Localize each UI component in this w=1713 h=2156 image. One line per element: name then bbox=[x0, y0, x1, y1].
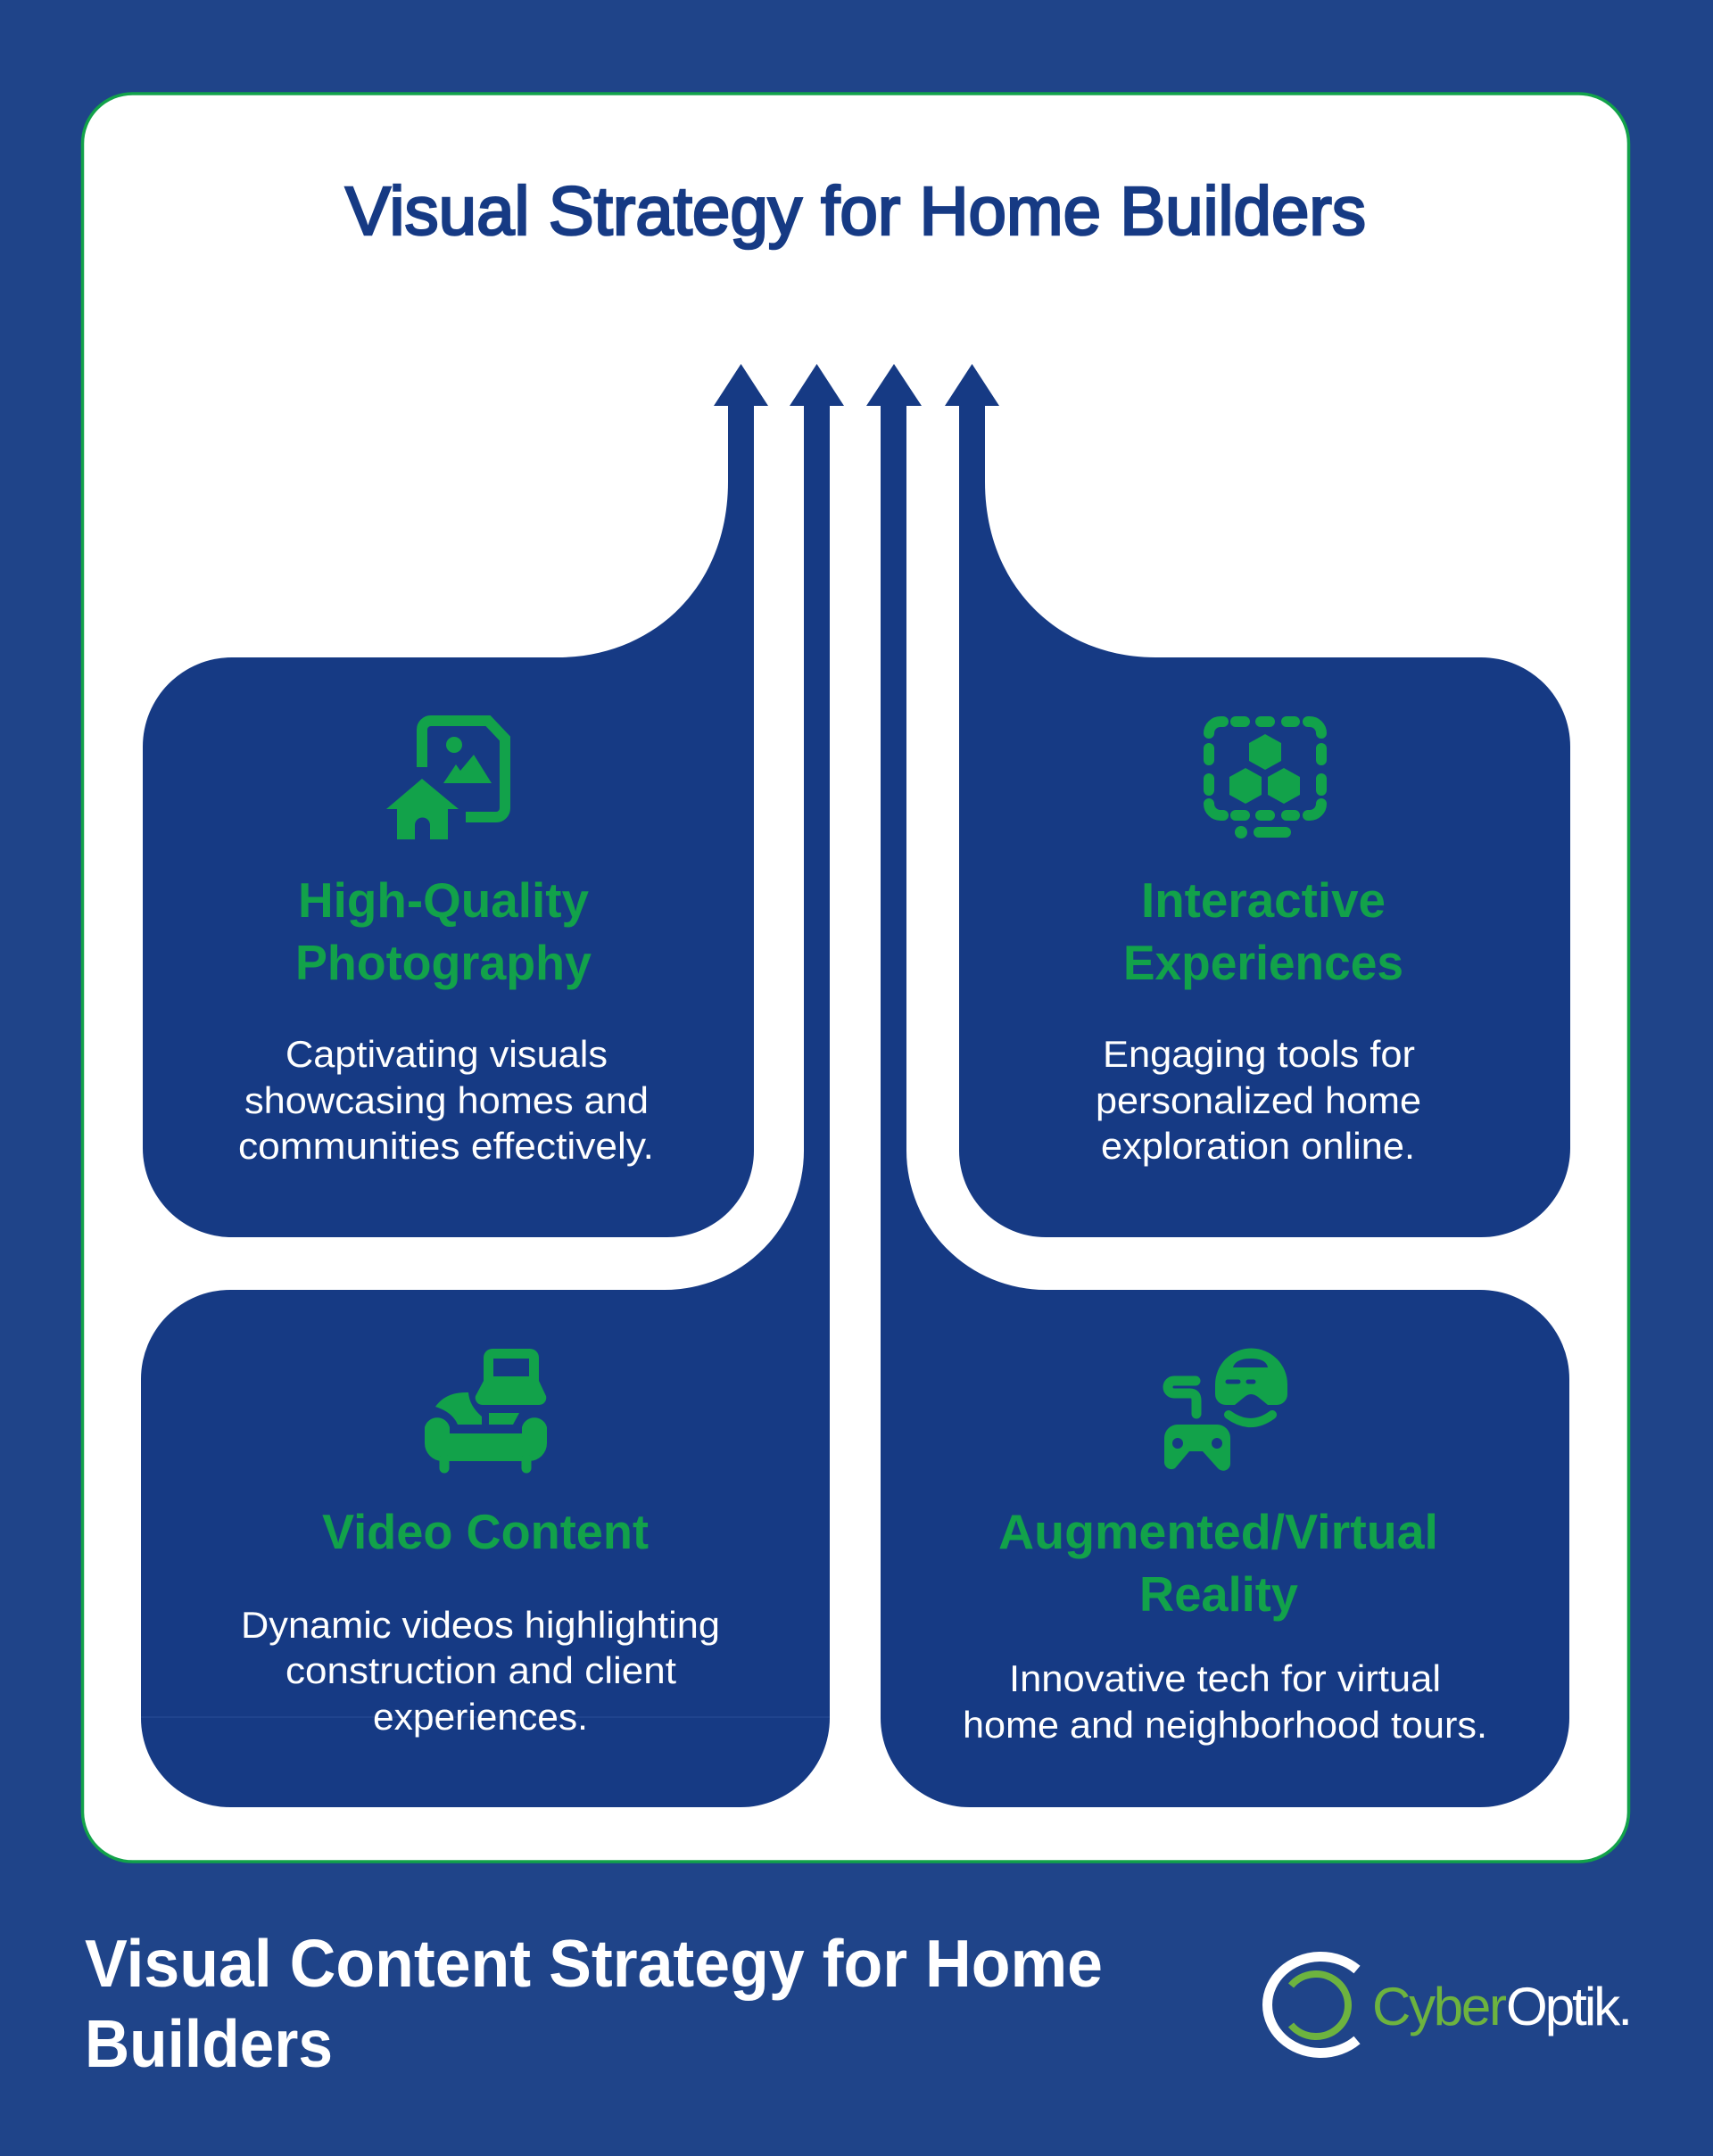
card shape with arrow: top right bbox=[945, 364, 1570, 1237]
description: communities effectively. bbox=[238, 1125, 654, 1167]
panel: high-quality photography bbox=[143, 364, 768, 1237]
logo: CyberOptik: Optik. bbox=[1506, 1977, 1633, 2036]
footer title: Builders bbox=[85, 2006, 333, 2081]
panel: main white card bbox=[82, 94, 1629, 1862]
card shape with arrow: bottom left bbox=[141, 364, 844, 1807]
description: Captivating visuals bbox=[286, 1033, 608, 1075]
panel: video content bbox=[141, 364, 844, 1807]
logo: CyberOptik bbox=[1268, 1957, 1633, 2053]
panel: interactive experiences bbox=[945, 364, 1570, 1237]
heading bbox=[295, 872, 592, 990]
description bbox=[241, 1604, 720, 1738]
logo: CyberOptik: Cyber bbox=[1372, 1977, 1507, 2036]
description: Dynamic videos highlighting bbox=[241, 1604, 720, 1646]
heading: Interactive bbox=[1141, 872, 1386, 928]
heading: Video Content bbox=[322, 1504, 649, 1559]
description: Innovative tech for virtual bbox=[1009, 1657, 1441, 1699]
description: home and neighborhood tours. bbox=[963, 1704, 1487, 1746]
description: showcasing homes and bbox=[244, 1079, 649, 1121]
description: Engaging tools for bbox=[1103, 1033, 1415, 1075]
description bbox=[238, 1033, 654, 1167]
icon: sofa and laptop bbox=[425, 1349, 547, 1468]
panel: augmented/virtual reality bbox=[866, 364, 1569, 1807]
card shape with arrow: top left bbox=[143, 364, 768, 1237]
description: exploration online. bbox=[1101, 1125, 1415, 1167]
heading: Photography bbox=[295, 935, 592, 990]
heading: Experiences bbox=[1123, 935, 1403, 990]
description bbox=[963, 1657, 1487, 1746]
heading bbox=[1123, 872, 1403, 990]
heading: Augmented/Virtual bbox=[998, 1504, 1438, 1559]
icon: VR headset and gamepad bbox=[1164, 1349, 1287, 1471]
card shape with arrow: bottom right bbox=[866, 364, 1569, 1807]
description bbox=[1096, 1033, 1421, 1167]
heading bbox=[998, 1504, 1438, 1622]
icon: house and picture bbox=[386, 721, 505, 839]
footer title: Visual Content Strategy for Home bbox=[85, 1926, 1103, 2001]
heading: High-Quality bbox=[298, 872, 589, 928]
description: personalized home bbox=[1096, 1079, 1421, 1121]
heading: Reality bbox=[1139, 1566, 1298, 1622]
description: construction and client bbox=[286, 1649, 676, 1691]
footer title bbox=[85, 1926, 1103, 2081]
description: experiences. bbox=[373, 1696, 588, 1738]
title: Visual Strategy for Home Builders bbox=[345, 173, 1366, 250]
icon: dashed frame with hexagons bbox=[1209, 722, 1321, 838]
